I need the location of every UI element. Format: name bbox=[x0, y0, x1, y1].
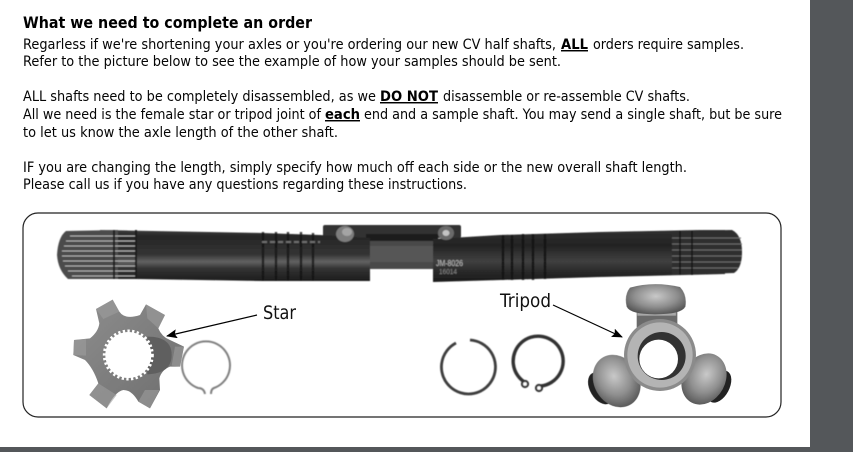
icon: open snap ring bbox=[441, 340, 495, 394]
text block: changing the length bbox=[23, 159, 687, 193]
text block: changing the length: Please call us if you have any questions regarding these instructions. bbox=[23, 176, 467, 193]
text block: samples requirement: Regarless if we're shortening your axles or you're ordering our new CV half shafts, bbox=[23, 36, 556, 53]
tripod top roller bbox=[626, 284, 686, 328]
arrow: Tripod bbox=[553, 305, 622, 337]
text block: disassembly instructions: All we need is the female star or tripod joint of bbox=[23, 106, 322, 123]
label: Star: Star bbox=[263, 302, 296, 324]
text block: samples requirement bbox=[23, 36, 744, 70]
text block: samples requirement: orders require samples. bbox=[593, 36, 744, 53]
text block: disassembly instructions bbox=[23, 88, 782, 141]
text block: samples requirement: ALL bbox=[561, 36, 588, 53]
text block: disassembly instructions: DO NOT bbox=[380, 88, 438, 105]
shaft part number: JM-8026 bbox=[436, 259, 463, 268]
text block: disassembly instructions: end and a sample shaft. You may send a single shaft, but be sure bbox=[364, 106, 782, 123]
text block: disassembly instructions: each bbox=[325, 106, 360, 123]
shaft left section bbox=[57, 230, 370, 281]
tripod left roller bbox=[583, 346, 650, 416]
icon: tripod joint bbox=[583, 284, 736, 416]
icon: star joint bbox=[73, 300, 184, 408]
shaft part number: 16014 bbox=[439, 269, 457, 276]
icon: star snap ring bbox=[182, 341, 230, 394]
text block: changing the length: IF you are changing the length, simply specify how much off each side or the new overall shaft length. bbox=[23, 159, 687, 176]
shaft bolts bbox=[336, 226, 454, 242]
panel: sample parts photo bbox=[23, 213, 781, 417]
label: Tripod: Tripod bbox=[499, 290, 551, 312]
shaft part number bbox=[436, 259, 463, 276]
arrow: Star bbox=[167, 315, 257, 336]
heading: What we need to complete an order bbox=[23, 13, 312, 32]
shaft right section bbox=[433, 230, 742, 282]
shaft centre plate bbox=[323, 225, 461, 269]
tripod right roller bbox=[673, 345, 736, 413]
text block: samples requirement: Refer to the picture below to see the example of how your samples should be sent. bbox=[23, 53, 561, 70]
text block: disassembly instructions: to let us know the axle length of the other shaft. bbox=[23, 124, 338, 141]
photo: CV half shaft bbox=[57, 225, 742, 282]
text block: disassembly instructions: disassemble or re-assemble CV shafts. bbox=[443, 88, 690, 105]
tripod hub bbox=[624, 319, 696, 391]
icon: circlip bbox=[513, 336, 563, 391]
text block: disassembly instructions: ALL shafts need to be completely disassembled, as we bbox=[23, 88, 376, 105]
